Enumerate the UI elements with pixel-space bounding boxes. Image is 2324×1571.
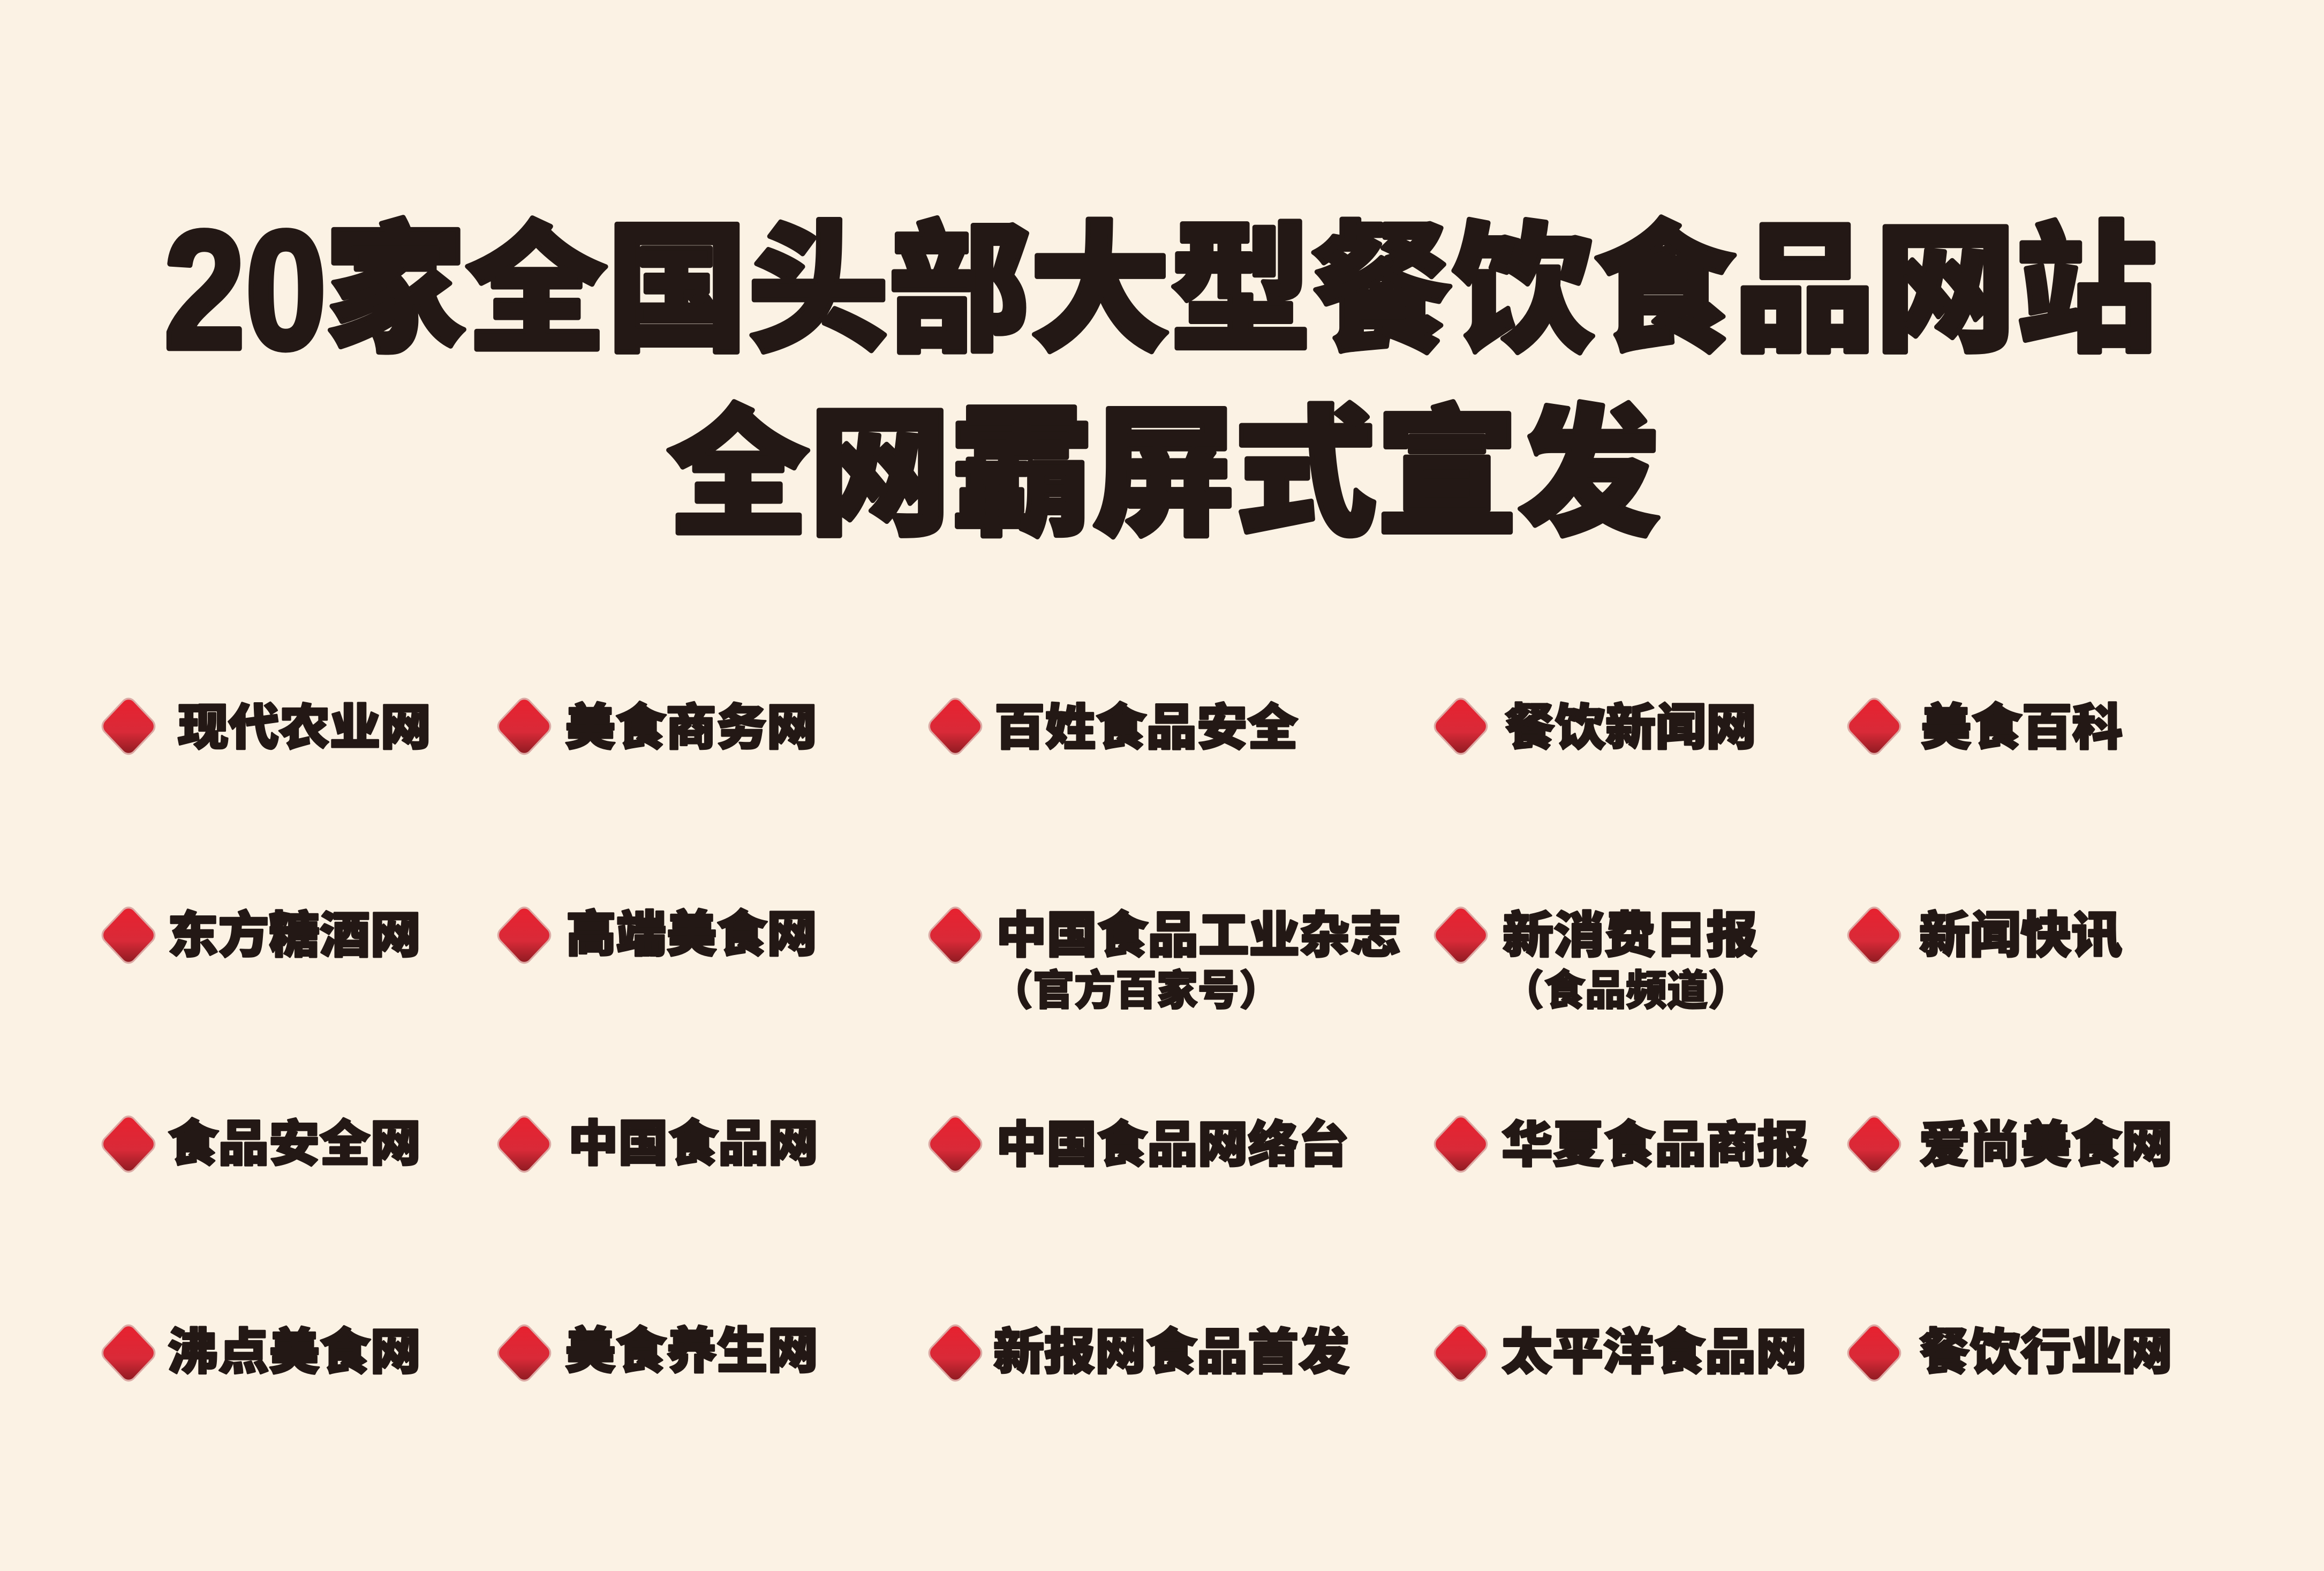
title: 全网霸屏式宣发 bbox=[667, 396, 1660, 553]
item: 餐饮行业网: 餐饮行业网 bbox=[1919, 1325, 2172, 1380]
item: 新消费日报 bbox=[1430, 903, 1757, 1014]
item: 餐饮新闻网: 餐饮新闻网 bbox=[1505, 701, 1756, 755]
item: 餐饮新闻网 bbox=[1430, 694, 1756, 758]
item: 新闻快讯 bbox=[1844, 903, 2122, 967]
item: 沸点美食网: 沸点美食网 bbox=[168, 1325, 421, 1380]
item: 高端美食网 bbox=[494, 903, 817, 967]
item: 新报网食品首发 bbox=[925, 1321, 1349, 1385]
item: 中国食品工业杂志: （官方百家号） bbox=[992, 967, 1280, 1014]
item: 美食百科: 美食百科 bbox=[1921, 701, 2123, 755]
item: 太平洋食品网: 太平洋食品网 bbox=[1501, 1325, 1807, 1380]
item: 现代农业网 bbox=[98, 694, 431, 758]
item: 爱尚美食网 bbox=[1844, 1112, 2172, 1176]
item: 美食商务网: 美食商务网 bbox=[565, 701, 817, 755]
item: 太平洋食品网 bbox=[1430, 1321, 1807, 1385]
website list bbox=[98, 694, 2172, 1385]
item: 新消费日报: （食品频道） bbox=[1503, 967, 1749, 1014]
item: 爱尚美食网: 爱尚美食网 bbox=[1919, 1118, 2172, 1172]
item: 中国食品工业杂志: 中国食品工业杂志 bbox=[996, 908, 1401, 963]
item: 食品安全网: 食品安全网 bbox=[168, 1117, 421, 1171]
item: 中国食品网络台: 中国食品网络台 bbox=[996, 1118, 1349, 1172]
item: 现代农业网: 现代农业网 bbox=[178, 701, 431, 755]
item: 中国食品网络台 bbox=[925, 1112, 1349, 1176]
item: 中国食品工业杂志 bbox=[925, 903, 1401, 1014]
item: 中国食品网 bbox=[494, 1112, 818, 1176]
item: 美食百科 bbox=[1844, 694, 2123, 758]
title bbox=[164, 196, 2157, 553]
item: 华夏食品商报 bbox=[1430, 1112, 1808, 1176]
item: 食品安全网 bbox=[98, 1112, 421, 1176]
item: 华夏食品商报: 华夏食品商报 bbox=[1501, 1118, 1808, 1172]
item: 美食养生网 bbox=[494, 1321, 818, 1385]
title: 家全国头部大型餐饮食品网站 bbox=[325, 212, 2157, 369]
item: 新闻快讯: 新闻快讯 bbox=[1919, 908, 2122, 963]
item: 中国食品网: 中国食品网 bbox=[568, 1117, 818, 1171]
item: 东方糖酒网: 东方糖酒网 bbox=[168, 908, 421, 963]
item: 新消费日报: 新消费日报 bbox=[1503, 908, 1757, 963]
item: 百姓食品安全: 百姓食品安全 bbox=[994, 701, 1298, 755]
item: 东方糖酒网 bbox=[98, 903, 421, 967]
item: 美食养生网: 美食养生网 bbox=[565, 1324, 818, 1379]
item: 美食商务网 bbox=[494, 694, 817, 758]
item: 餐饮行业网 bbox=[1844, 1321, 2172, 1385]
item: 百姓食品安全 bbox=[925, 694, 1298, 758]
item: 新报网食品首发: 新报网食品首发 bbox=[993, 1325, 1349, 1380]
title: 20 bbox=[164, 196, 327, 384]
item: 沸点美食网 bbox=[98, 1321, 421, 1385]
item: 高端美食网: 高端美食网 bbox=[566, 907, 817, 962]
